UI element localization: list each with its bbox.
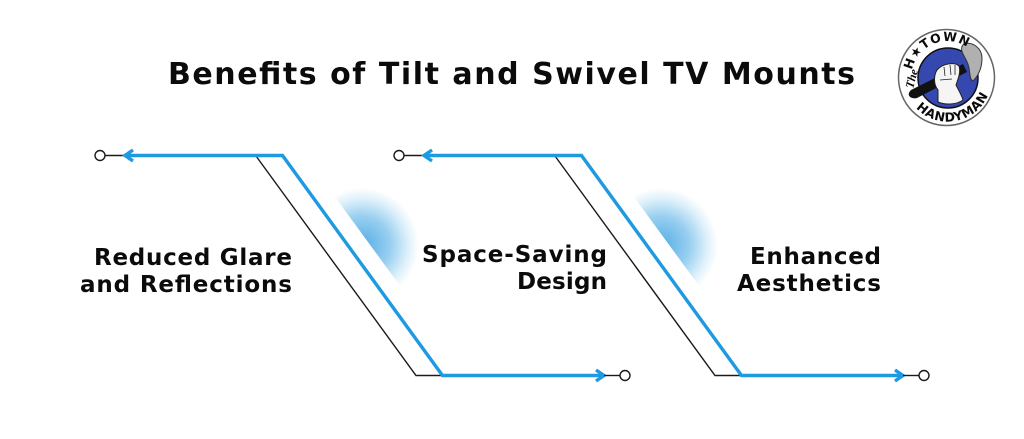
- label: Enhanced Aesthetics: Aesthetics: [737, 271, 881, 297]
- connector 1: right terminal: [604, 370, 630, 380]
- label: Reduced Glare and Reflections: [80, 245, 292, 298]
- connector 2: left terminal: [394, 150, 424, 160]
- logo hammer handle: [909, 64, 967, 98]
- logo top text: H★TOWN: [904, 32, 970, 69]
- label: Space-Saving Design: Design: [517, 269, 607, 295]
- logo fist: [934, 64, 963, 104]
- connector 2: shadow black line: [555, 156, 742, 376]
- glow 1: [327, 186, 425, 294]
- connector 2: right arrowhead: [895, 370, 903, 381]
- connector 1: shadow black line: [256, 156, 443, 376]
- label: Space-Saving Design: Space-Saving: [422, 242, 607, 268]
- connector 1: left arrowhead: [125, 150, 133, 161]
- logo script text: The: [902, 67, 921, 90]
- connector 1: right arrowhead: [596, 370, 604, 381]
- connector 2: right terminal: [903, 370, 929, 380]
- label: Reduced Glare and Reflections: and Reflections: [80, 272, 292, 298]
- label: Reduced Glare and Reflections: Reduced Glare: [94, 245, 292, 271]
- logo: The H-Town Handyman: [898, 28, 996, 126]
- glow 2: [626, 186, 724, 294]
- logo hammer head: [962, 43, 982, 81]
- label: Enhanced Aesthetics: [737, 244, 881, 297]
- label: Space-Saving Design: [422, 242, 607, 295]
- logo blue disc: [918, 48, 978, 108]
- connector 1: blue path: [128, 156, 602, 376]
- connector 1: left terminal: [95, 150, 125, 160]
- connector 2: left arrowhead: [424, 150, 432, 161]
- title: Benefits of Tilt and Swivel TV Mounts: [168, 57, 855, 92]
- logo bottom text: HANDYMAN: [916, 92, 988, 122]
- label: Enhanced Aesthetics: Enhanced: [750, 244, 881, 270]
- connector 2: blue path: [427, 156, 901, 376]
